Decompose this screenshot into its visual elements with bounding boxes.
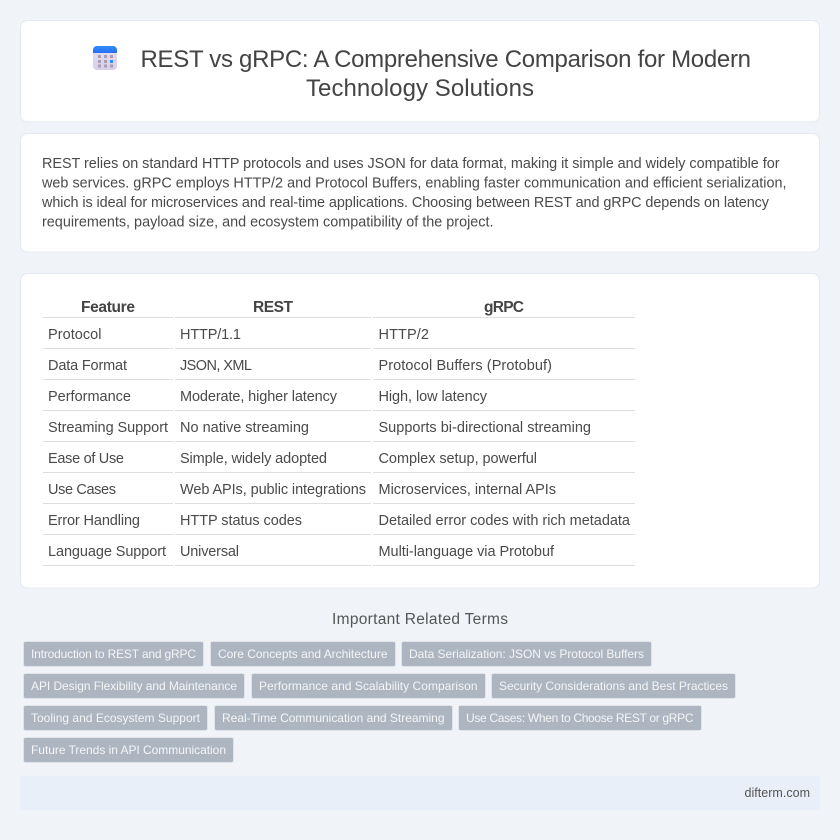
footer: difterm.com [744,786,810,800]
related term tags: Real-Time Communication and Streaming [222,711,444,725]
row: error handling [48,513,631,529]
row: protocol: HTTP/1.1 [180,327,241,343]
row: performance [48,389,488,405]
related term tags: Data Serialization: JSON vs Protocol Buffers [409,647,644,661]
title: REST vs gRPC: A Comprehensive Comparison for Modern [140,46,751,73]
row: data format [48,358,552,374]
row: ease of use: Simple, widely adopted [180,451,327,467]
row: data format: Protocol Buffers (Protobuf) [378,358,552,374]
row: error handling: Error Handling [48,513,140,529]
row: performance: High, low latency [378,389,488,405]
row: streaming support [48,420,591,436]
table header row: REST [253,299,294,316]
row: use cases: Microservices, internal APIs [378,482,556,498]
row: language support: Language Support [48,544,166,560]
panel: header [20,20,820,122]
panel: comparison table [20,274,820,588]
related term tags: Future Trends in API Communication [31,743,226,757]
row: language support [48,544,555,560]
title [140,46,751,102]
row: error handling: HTTP status codes [180,513,302,529]
related term tags: Performance and Scalability Comparison [259,679,478,693]
row: language support: Universal [180,544,239,560]
row: use cases: Use Cases [48,482,116,498]
row: use cases [48,482,556,498]
row: performance: Performance [48,389,131,405]
heading: related terms: Important Related Terms [332,611,508,628]
related term tags: Use Cases: When to Choose REST or gRPC [466,711,694,725]
row: use cases: Web APIs, public integrations [180,482,366,498]
row: protocol [48,327,429,343]
row: data format: Data Format [48,358,127,374]
related term tags [24,642,736,762]
panel: summary [20,134,820,252]
row: protocol: Protocol [48,327,102,343]
related term tags: Tooling and Ecosystem Support [31,711,201,725]
row: data format: JSON, XML [180,358,252,374]
row: error handling: Detailed error codes with rich metadata [378,513,631,529]
table header row: Feature [81,299,135,316]
row: streaming support: No native streaming [180,420,309,436]
row: language support: Multi-language via Protobuf [378,544,555,560]
summary text [41,156,786,230]
summary text: which is ideal for microservices and real-time applications. Choosing between REST and gRPC depends on latency [41,195,770,211]
row: ease of use [48,451,537,467]
table header row: gRPC [484,299,524,316]
icon: calendar [93,46,117,70]
table header row [81,299,524,316]
title: Technology Solutions [306,75,534,102]
summary text: requirements, payload size, and ecosystem compatibility of the project. [42,214,494,230]
row: ease of use: Ease of Use [48,451,124,467]
summary text: REST relies on standard HTTP protocols and uses JSON for data format, making it simple and widely compatible for [42,156,780,172]
row: streaming support: Supports bi-directional streaming [378,420,591,436]
related term tags: Core Concepts and Architecture [218,647,388,661]
related term tags: API Design Flexibility and Maintenance [31,679,237,693]
related term tags: Security Considerations and Best Practices [499,679,728,693]
row: streaming support: Streaming Support [48,420,168,436]
row: protocol: HTTP/2 [378,327,429,343]
footer [20,776,820,810]
related term tags: Introduction to REST and gRPC [31,647,196,661]
summary text: web services. gRPC employs HTTP/2 and Protocol Buffers, enabling faster communication and efficient serialization, [41,176,786,192]
row: performance: Moderate, higher latency [180,389,338,405]
row: ease of use: Complex setup, powerful [378,451,537,467]
